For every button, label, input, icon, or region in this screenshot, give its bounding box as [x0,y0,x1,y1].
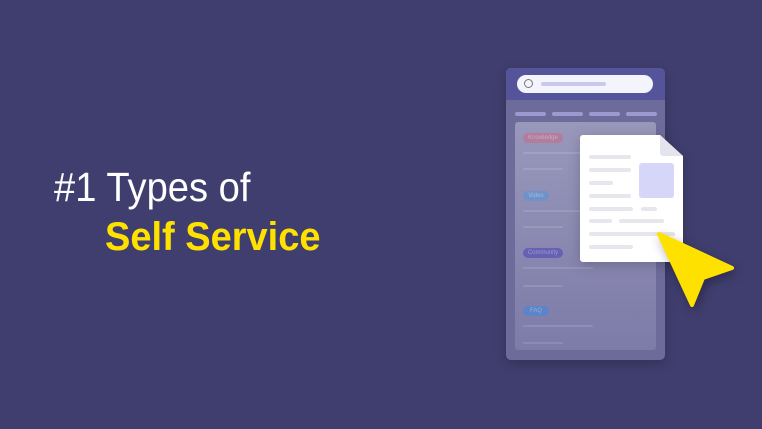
icon: cursor [656,232,736,310]
list panel: Community [528,250,558,256]
heading line 2: Self Service [105,215,320,259]
header bar [506,68,665,100]
document card [575,133,685,270]
list panel [515,122,656,350]
phone illustration [506,68,665,360]
heading line 1: #1 Types of [54,164,250,210]
list panel: FAQ [530,308,542,314]
list panel: Video [528,193,544,199]
tabs [515,112,657,116]
image placeholder [639,163,674,198]
search bar [517,75,653,93]
title [54,164,320,259]
list panel: Knowledge [528,135,558,141]
